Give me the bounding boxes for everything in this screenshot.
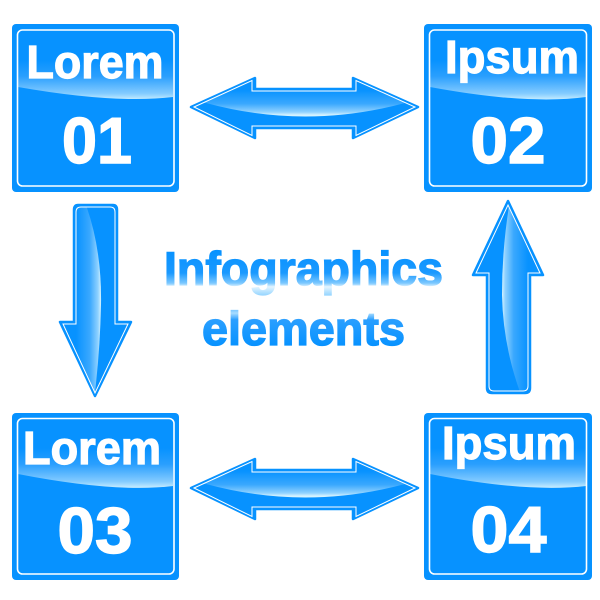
arrow: double-headed between 01 and 02 bbox=[190, 78, 420, 138]
panel: Ipsum 02 bbox=[424, 24, 592, 192]
panel: Lorem 03 bbox=[12, 413, 179, 580]
heading: Ipsum: Ipsum bbox=[445, 31, 579, 83]
gloss band bbox=[18, 32, 173, 99]
heading: Lorem: Lorem bbox=[23, 422, 161, 474]
arrow: down from 01 to 03 bbox=[60, 205, 131, 396]
title line: elements: elements bbox=[202, 302, 405, 355]
arrow: up from 04 to 02 bbox=[473, 201, 545, 393]
number: 02: 02 bbox=[470, 104, 546, 177]
title bbox=[164, 242, 443, 355]
gloss band bbox=[430, 420, 586, 488]
number: 03: 03 bbox=[58, 494, 132, 567]
panel: Lorem 01 bbox=[12, 24, 179, 192]
title line: Infographics: Infographics bbox=[164, 242, 443, 295]
number: 01: 01 bbox=[62, 104, 132, 177]
heading: Lorem: Lorem bbox=[26, 36, 164, 88]
arrow: double-headed between 03 and 04 bbox=[190, 459, 420, 519]
number: 04: 04 bbox=[470, 493, 546, 566]
gloss band bbox=[430, 32, 586, 99]
panel: Ipsum 04 bbox=[424, 413, 592, 580]
gloss band bbox=[18, 420, 173, 488]
heading: Ipsum: Ipsum bbox=[442, 417, 576, 469]
